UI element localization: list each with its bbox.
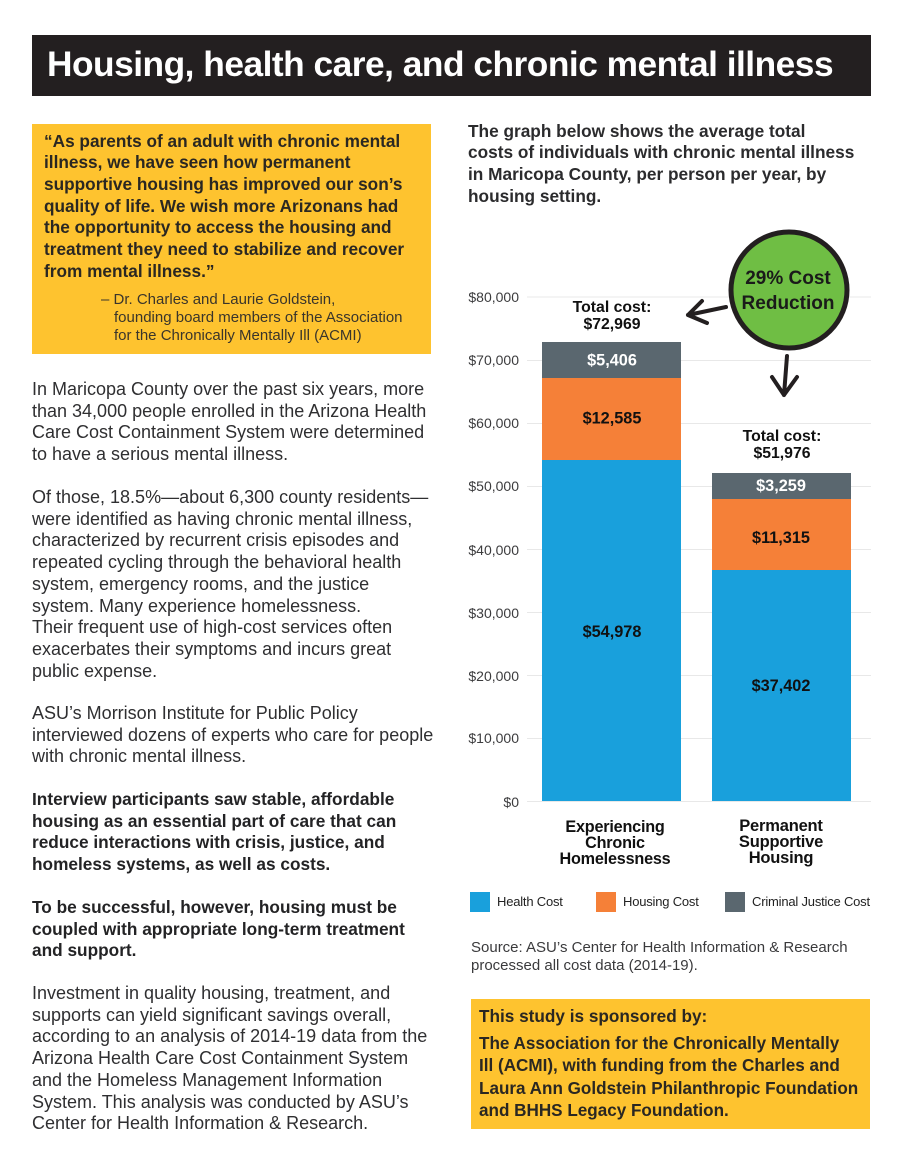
paragraph: investment savings: Investment in quality housing, treatment, and bbox=[32, 983, 390, 1003]
paragraph: chronic mental illness: repeated cycling through the behavioral health bbox=[32, 552, 401, 572]
paragraph: chronic mental illness: Their frequent use of high-cost services often bbox=[32, 617, 392, 637]
y axis labels: $10,000 bbox=[468, 730, 519, 746]
category label: housing: Housing bbox=[749, 849, 813, 867]
quote attribution: founding board members of the Association bbox=[114, 309, 403, 326]
paragraph: investment savings: Arizona Health Care Cost Containment System bbox=[32, 1048, 408, 1068]
paragraph: interview findings bbox=[32, 789, 396, 874]
paragraph: county enrollment: to have a serious mental illness. bbox=[32, 444, 288, 464]
total cost label: housing: $51,976 bbox=[753, 445, 811, 462]
paragraph: Morrison Institute: ASU’s Morrison Institute for Public Policy bbox=[32, 703, 358, 723]
sponsor text: and BHHS Legacy Foundation. bbox=[479, 1101, 729, 1120]
quote text: illness, we have seen how permanent bbox=[44, 152, 350, 172]
quote attribution bbox=[101, 291, 403, 344]
bar: permanent supportive housing: $37,402 bbox=[752, 677, 810, 695]
paragraph: investment savings: System. This analysis was conducted by ASU’s bbox=[32, 1092, 409, 1112]
paragraph: county enrollment: In Maricopa County over the past six years, more bbox=[32, 379, 424, 399]
panel: quote bbox=[32, 124, 431, 354]
callout: 29% cost reduction: 29% Cost bbox=[745, 268, 831, 289]
sponsor text bbox=[479, 1034, 858, 1120]
chart introduction: The graph below shows the average total bbox=[468, 120, 805, 140]
title banner bbox=[32, 35, 871, 96]
y axis labels: $50,000 bbox=[468, 478, 519, 494]
y axis labels: $0 bbox=[503, 794, 519, 810]
source note: Source: ASU’s Center for Health Information & Research bbox=[471, 939, 848, 956]
paragraph: county enrollment: than 34,000 people enrolled in the Arizona Health bbox=[32, 401, 426, 421]
callout: 29% cost reduction bbox=[731, 232, 847, 348]
paragraph: investment savings: Center for Health Information & Research. bbox=[32, 1113, 368, 1133]
paragraph: Morrison Institute: with chronic mental illness. bbox=[32, 746, 246, 766]
bar: permanent supportive housing: $11,315 bbox=[752, 529, 810, 547]
arrow: to homelessness total bbox=[688, 301, 726, 323]
paragraph: chronic mental illness: public expense. bbox=[32, 661, 157, 681]
category label: homelessness: Homelessness bbox=[560, 850, 671, 868]
paragraph: Morrison Institute bbox=[32, 703, 433, 766]
category label: housing: Permanent bbox=[739, 817, 823, 835]
source note bbox=[471, 939, 848, 974]
paragraph: chronic mental illness bbox=[32, 487, 428, 681]
quote text: the opportunity to access the housing and bbox=[44, 217, 392, 237]
paragraph: treatment coupling: To be successful, however, housing must be bbox=[32, 897, 397, 917]
chart introduction: in Maricopa County, per person per year, by bbox=[468, 164, 826, 184]
paragraph: investment savings: and the Homeless Management Information bbox=[32, 1070, 382, 1090]
paragraph: treatment coupling: coupled with appropriate long-term treatment bbox=[32, 919, 405, 939]
category label: homelessness: Experiencing bbox=[565, 818, 665, 836]
y axis labels: $30,000 bbox=[468, 605, 519, 621]
quote text: treatment they need to stabilize and recover bbox=[44, 239, 404, 259]
total cost label: housing: Total cost: bbox=[743, 428, 821, 445]
y axis labels: $60,000 bbox=[468, 415, 519, 431]
quote text bbox=[44, 130, 404, 281]
quote text: “As parents of an adult with chronic mental bbox=[44, 130, 400, 150]
quote text: from mental illness.” bbox=[44, 261, 214, 281]
paragraph: county enrollment bbox=[32, 379, 426, 464]
arrow: to housing total bbox=[772, 356, 797, 395]
paragraph: interview findings: reduce interactions with crisis, justice, and bbox=[32, 832, 385, 852]
quote text: quality of life. We wish more Arizonans had bbox=[44, 196, 398, 216]
legend: Health Cost bbox=[497, 894, 563, 909]
paragraph: county enrollment: Care Cost Containment System were determined bbox=[32, 422, 424, 442]
chart introduction bbox=[468, 120, 854, 206]
source note: processed all cost data (2014-19). bbox=[471, 957, 698, 974]
paragraph: chronic mental illness: were identified as having chronic mental illness, bbox=[32, 509, 412, 529]
paragraph: chronic mental illness: exacerbates their symptoms and incurs great bbox=[32, 639, 391, 659]
total cost label: homelessness: $72,969 bbox=[583, 316, 641, 333]
quote attribution: – Dr. Charles and Laurie Goldstein, bbox=[101, 291, 335, 308]
y axis labels bbox=[468, 289, 519, 810]
paragraph: treatment coupling: and support. bbox=[32, 940, 136, 960]
paragraph: chronic mental illness: system, emergency rooms, and the justice bbox=[32, 574, 369, 594]
paragraph: Morrison Institute: interviewed dozens of experts who care for people bbox=[32, 725, 433, 745]
category label: housing: Supportive bbox=[739, 833, 823, 851]
y axis labels: $20,000 bbox=[468, 668, 519, 684]
legend bbox=[470, 892, 870, 912]
chart introduction: housing setting. bbox=[468, 186, 601, 206]
paragraph: chronic mental illness: Of those, 18.5%—about 6,300 county residents— bbox=[32, 487, 428, 507]
bar: experiencing chronic homelessness bbox=[542, 342, 681, 801]
quote attribution: for the Chronically Mentally Ill (ACMI) bbox=[114, 327, 362, 344]
total cost label: homelessness: Total cost: bbox=[573, 299, 651, 316]
bar: experiencing chronic homelessness: $12,585 bbox=[583, 410, 641, 428]
bar: experiencing chronic homelessness: $5,406 bbox=[587, 352, 637, 370]
title: Housing, health care, and chronic mental illness bbox=[47, 45, 833, 84]
category label: homelessness: Chronic bbox=[585, 834, 645, 852]
bar: experiencing chronic homelessness: $54,978 bbox=[583, 623, 641, 641]
paragraph: interview findings: homeless systems, as well as costs. bbox=[32, 854, 330, 874]
paragraph: interview findings: housing as an essential part of care that can bbox=[32, 811, 396, 831]
bar: permanent supportive housing bbox=[712, 473, 851, 801]
y axis labels: $70,000 bbox=[468, 352, 519, 368]
quote text: supportive housing has improved our son’s bbox=[44, 174, 402, 194]
y axis labels: $80,000 bbox=[468, 289, 519, 305]
chart introduction: costs of individuals with chronic mental illness bbox=[468, 142, 854, 162]
paragraph: chronic mental illness: characterized by recurrent crisis episodes and bbox=[32, 530, 399, 550]
legend: Criminal Justice Cost bbox=[752, 894, 870, 909]
sponsor text: Laura Ann Goldstein Philanthropic Foundation bbox=[479, 1079, 858, 1098]
stacked bar chart bbox=[468, 230, 871, 912]
y axis labels: $40,000 bbox=[468, 542, 519, 558]
sponsor heading: This study is sponsored by: bbox=[479, 1006, 707, 1026]
paragraph: investment savings: according to an analysis of 2014-19 data from the bbox=[32, 1026, 427, 1046]
panel: sponsor bbox=[471, 999, 870, 1129]
sponsor text: Ill (ACMI), with funding from the Charles and bbox=[479, 1056, 840, 1075]
callout: 29% cost reduction: Reduction bbox=[742, 293, 834, 314]
paragraph: investment savings bbox=[32, 983, 427, 1133]
paragraph: investment savings: supports can yield significant savings overall, bbox=[32, 1005, 391, 1025]
paragraph: interview findings: Interview participants saw stable, affordable bbox=[32, 789, 394, 809]
legend: Housing Cost bbox=[623, 894, 699, 909]
paragraph: chronic mental illness: system. Many experience homelessness. bbox=[32, 596, 361, 616]
paragraph: treatment coupling bbox=[32, 897, 405, 960]
bar: permanent supportive housing: $3,259 bbox=[756, 477, 806, 495]
sponsor text: The Association for the Chronically Mentally bbox=[479, 1034, 839, 1053]
